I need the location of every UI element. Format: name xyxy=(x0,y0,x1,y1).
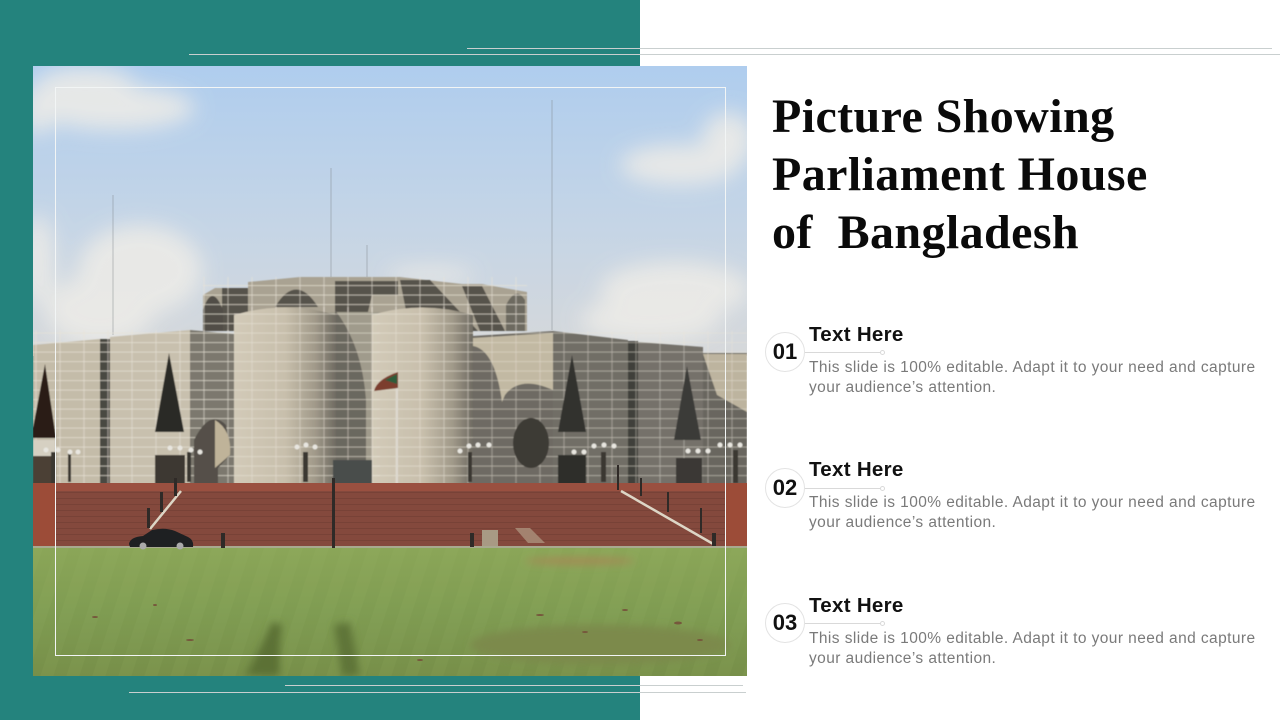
text 03 xyxy=(809,630,1256,666)
item 03 xyxy=(765,594,1256,666)
title: Parliament House xyxy=(772,148,1148,201)
item 02 xyxy=(765,458,1256,530)
heading 01: Text Here xyxy=(809,323,904,346)
connector 03 xyxy=(805,623,881,624)
title xyxy=(772,90,1148,259)
text 02: your audience’s attention. xyxy=(809,514,996,530)
text 01: your audience’s attention. xyxy=(809,378,996,396)
number 02 xyxy=(765,468,805,508)
item 01 xyxy=(765,323,1256,396)
number 03 xyxy=(765,603,805,643)
white photo frame xyxy=(55,87,726,656)
sky xyxy=(33,66,747,356)
text 01: This slide is 100% editable. Adapt it to your need and capture xyxy=(809,359,1256,376)
brick plinth and steps xyxy=(33,483,747,547)
connector dot 01 xyxy=(880,350,885,355)
text 02: This slide is 100% editable. Adapt it to your need and capture xyxy=(809,494,1256,511)
text 03: your audience’s attention. xyxy=(809,650,996,666)
heading 02: Text Here xyxy=(809,458,904,481)
grass lawn xyxy=(33,546,747,676)
car xyxy=(129,529,193,550)
number 01: 01 xyxy=(773,339,797,364)
title: of Bangladesh xyxy=(772,206,1079,259)
left wing xyxy=(33,330,234,484)
clouds xyxy=(20,67,754,345)
title: Picture Showing xyxy=(772,90,1114,143)
right wing xyxy=(473,331,747,484)
text 01 xyxy=(809,359,1256,396)
small lamps and bollards xyxy=(147,465,716,548)
connector dot 03 xyxy=(880,621,885,626)
text 03: This slide is 100% editable. Adapt it to your need and capture xyxy=(809,630,1256,647)
cylinders xyxy=(234,307,474,484)
lamp posts xyxy=(44,442,742,484)
upper drum xyxy=(203,277,527,331)
heading 03: Text Here xyxy=(809,594,904,617)
number 03: 03 xyxy=(773,610,797,635)
number 02: 02 xyxy=(773,475,797,500)
text 02 xyxy=(809,494,1256,530)
connector 01 xyxy=(805,352,881,353)
connector 02 xyxy=(805,488,881,489)
connector dot 02 xyxy=(880,486,885,491)
antenna masts xyxy=(113,100,552,335)
teal background panel xyxy=(0,0,640,720)
photo: parliament house of Bangladesh xyxy=(33,66,747,676)
number 01 xyxy=(765,332,805,372)
parliament building xyxy=(33,277,747,484)
